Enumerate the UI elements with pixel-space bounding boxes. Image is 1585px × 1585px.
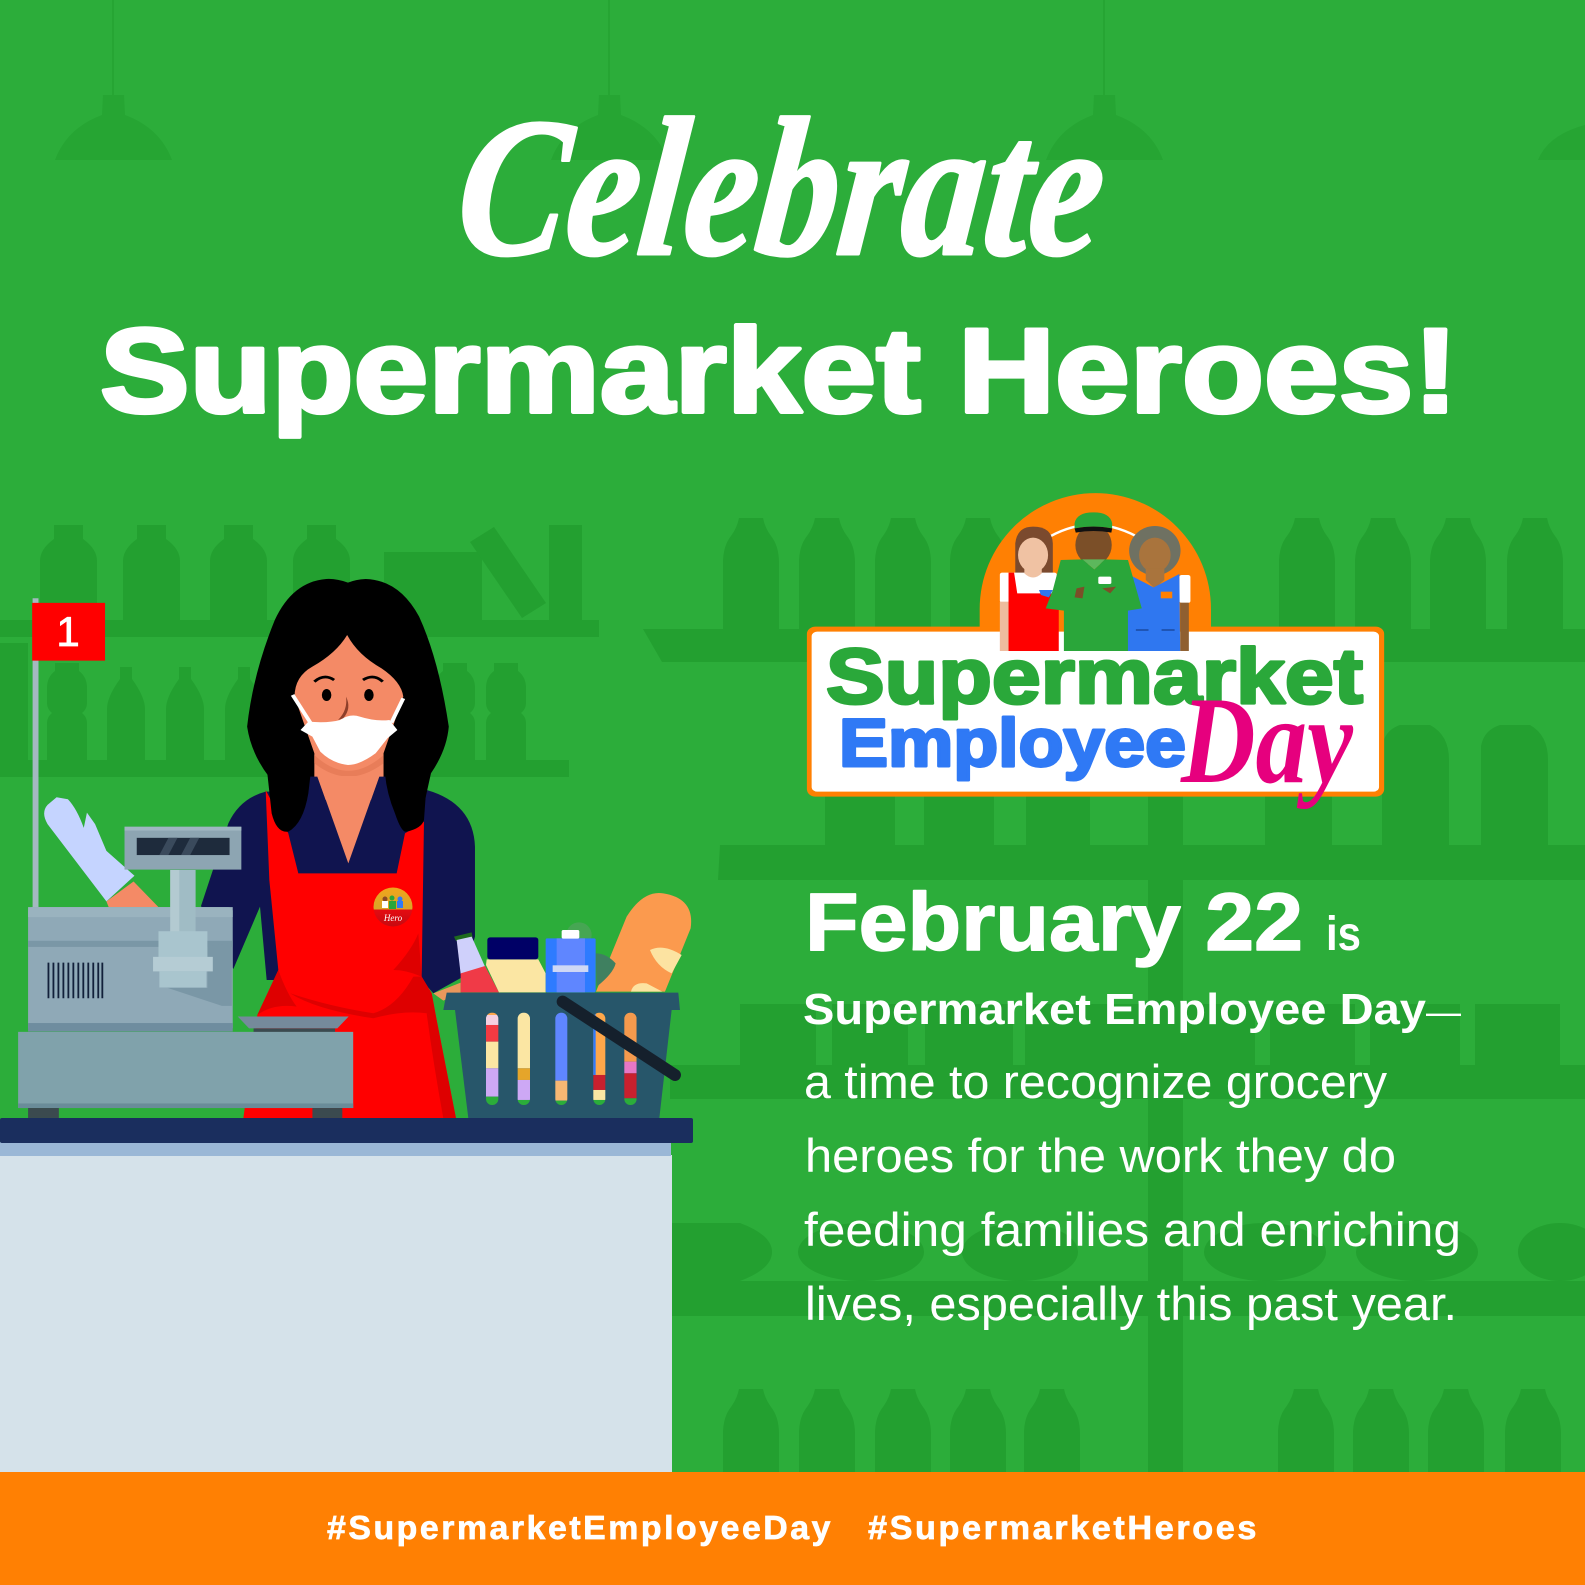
title: Supermarket Heroes!: Supermarket Heroes! <box>100 304 1458 438</box>
hashtag: SupermarketHeroes: #SupermarketHeroes <box>868 1509 1259 1546</box>
date line: February 22 <box>805 877 1303 968</box>
gloved hand and arm <box>44 797 158 907</box>
logo word: Supermarket: Supermarket <box>826 632 1363 720</box>
man in green uniform <box>1039 512 1142 651</box>
title: Celebrate: Celebrate <box>448 77 1116 297</box>
hero badge: Hero <box>383 913 403 923</box>
hero badge <box>374 888 412 926</box>
word: is: is <box>1326 908 1361 961</box>
bold line: Supermarket Employee Day <box>803 985 1427 1034</box>
woman in red apron <box>1000 527 1059 651</box>
hashtag: SupermarketEmployeeDay: #SupermarketEmployeeDay <box>327 1509 833 1546</box>
description line 3: feeding families and enriching <box>804 1203 1461 1256</box>
lane flag pole <box>32 598 105 908</box>
torso and sleeves <box>201 790 475 993</box>
hair and face <box>247 579 449 800</box>
red apron, collar and hair locks <box>243 773 456 1118</box>
woman in blue vest <box>1124 526 1190 651</box>
lane number: 1 <box>56 608 80 655</box>
checkout counter <box>0 1118 693 1473</box>
grocery basket <box>433 893 691 1118</box>
description line 1: a time to recognize grocery <box>804 1055 1388 1108</box>
description line 2: heroes for the work they do <box>805 1129 1396 1182</box>
logo word: Employee: Employee <box>839 705 1186 781</box>
cash register <box>18 827 353 1118</box>
logo arch and employees <box>807 493 1384 797</box>
logo word: Day: Day <box>1180 672 1354 809</box>
description line 4: lives, especially this past year. <box>805 1277 1457 1330</box>
em dash: — <box>1426 993 1461 1032</box>
illustration: cashier at checkout <box>0 579 693 1473</box>
logo: Supermarket Employee Day <box>807 493 1384 809</box>
footer band with hashtags <box>0 1472 1585 1585</box>
body text block <box>803 877 1461 1330</box>
cashier figure <box>201 579 475 1118</box>
